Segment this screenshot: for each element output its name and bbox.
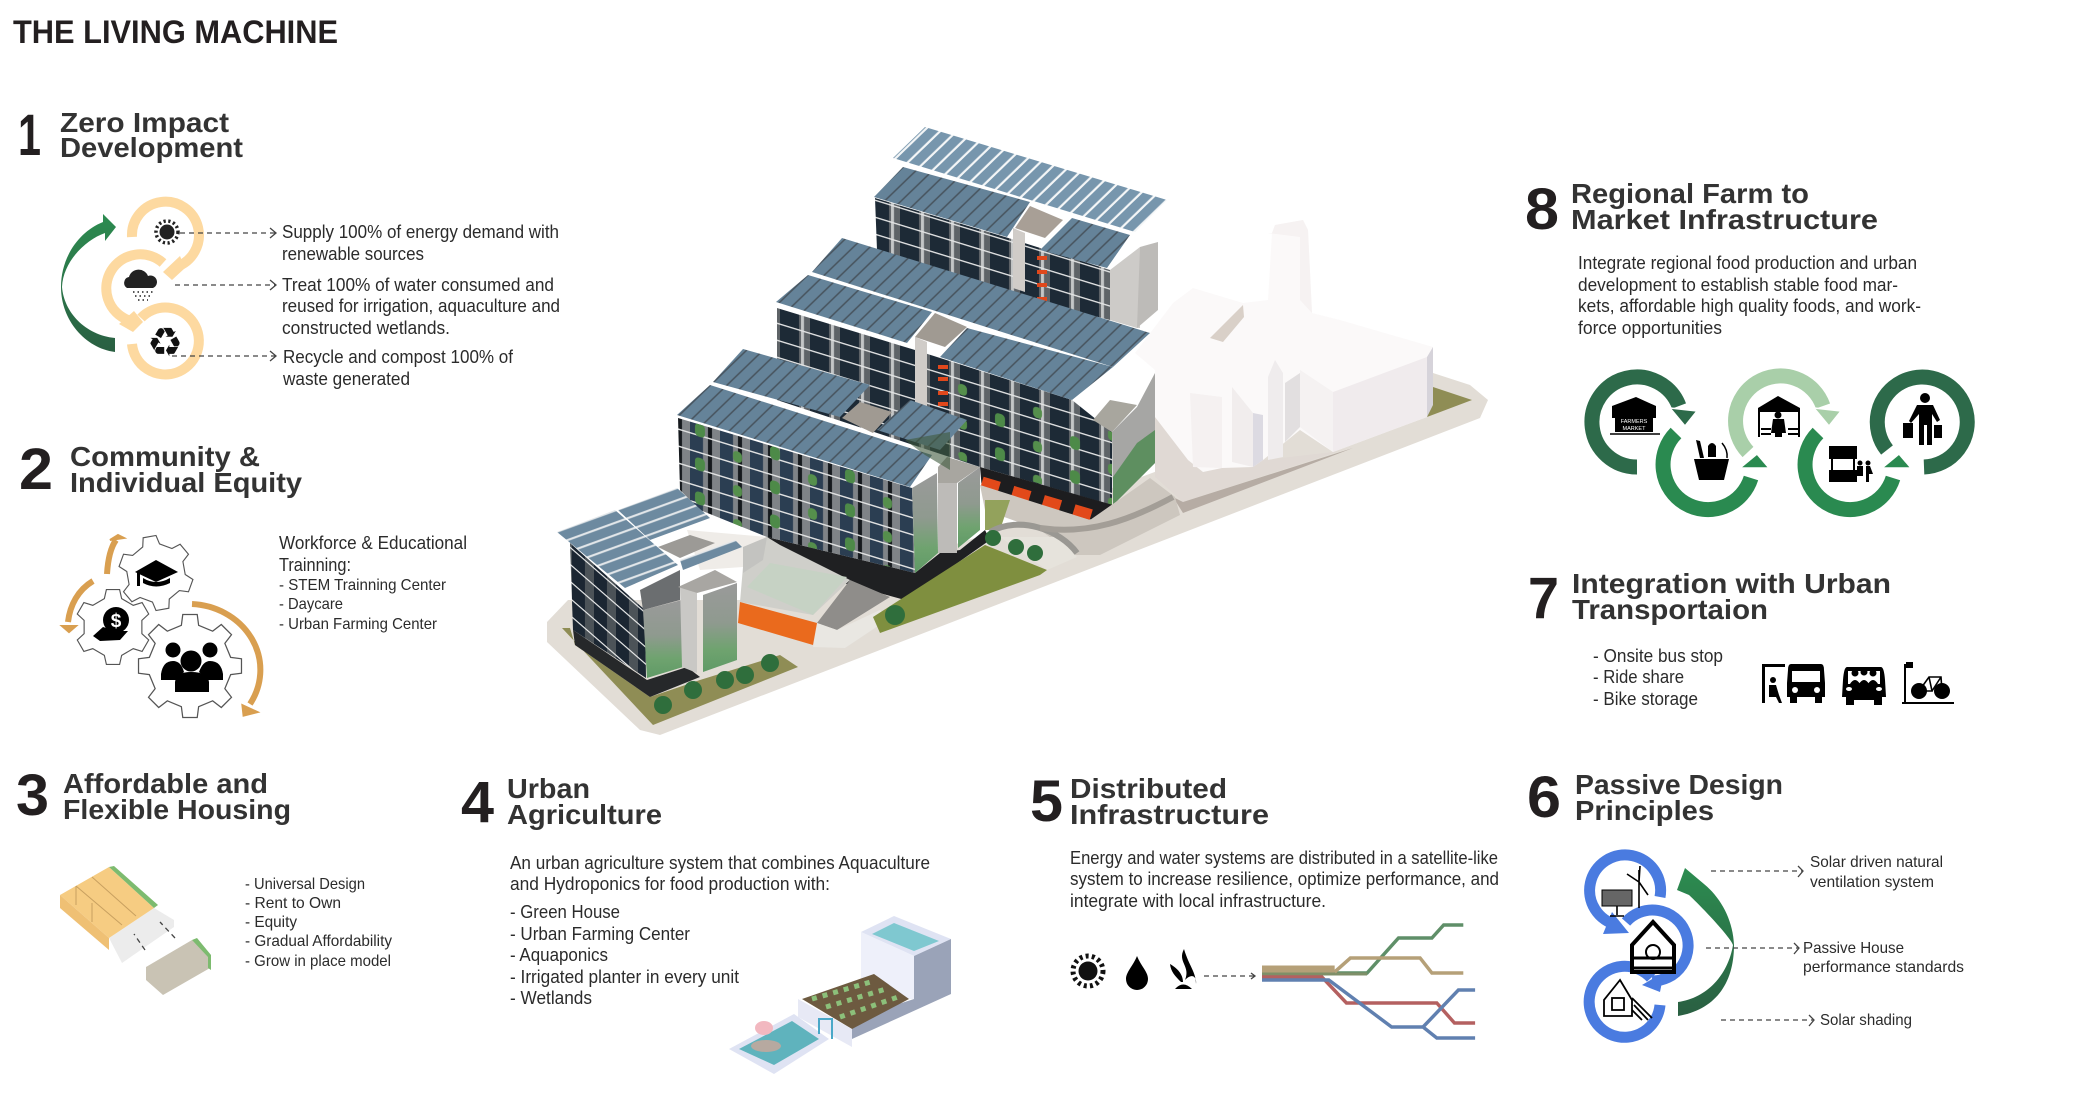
text block [510,853,930,1008]
text block: Integrate regional food production and urban [1578,253,1917,273]
icon: ride share car [1842,667,1886,705]
text block: Recycle and compost 100% of [283,347,514,367]
text block: - Wetlands [510,988,592,1008]
heading [1070,773,1269,830]
text block: performance standards [1803,959,1964,976]
section 7: integration with urban transportation [1528,566,1954,709]
number 6: 6 [1527,765,1561,830]
text block: - Daycare [279,596,343,613]
text block: Supply 100% of energy demand with [282,222,559,242]
text block: - Green House [510,902,620,922]
white church massing [1135,220,1433,472]
dashed arrow [1204,973,1255,979]
section 3: affordable and flexible housing [16,763,392,995]
heading: Distributed [1070,773,1227,804]
title: THE LIVING MACHINE [13,14,338,50]
text block [1070,848,1499,911]
heading [63,768,291,825]
text block [279,533,467,633]
text block: Workforce & Educational [279,533,467,553]
aquaponics illustration [729,916,951,1074]
heading: Urban [507,773,590,804]
section 6: passive design principles [1527,765,1964,1037]
number 3: 3 [16,763,49,828]
icon: recycle: ♻ [147,320,183,366]
section 4: urban agriculture [461,770,951,1074]
heading: Infrastructure [1070,799,1269,830]
icon: bus shelter [1762,664,1785,703]
text block: Trainning: [279,555,351,575]
heading: Affordable and [63,768,268,799]
text block: - Grow in place model [245,953,391,970]
text block: Solar driven natural [1810,854,1943,871]
text block: integrate with local infrastructure. [1070,891,1326,911]
icon: water drop [1126,956,1148,990]
icon: three people [161,642,223,692]
heading [1572,568,1891,625]
text block: - Ride share [1593,667,1684,687]
icon: hand with dollar [93,607,129,641]
icon: bike storage [1902,662,1954,703]
heading [507,773,662,830]
text block: ventilation system [1810,874,1934,891]
number 1: 1 [18,103,41,168]
heading: Community & [70,441,260,472]
heading [1575,769,1783,826]
icon: vendor tent [1758,396,1800,437]
network line diagram [1262,925,1475,1038]
text block [282,222,560,389]
icon: bus [1787,664,1825,703]
text block [1578,253,1921,338]
text block: An urban agriculture system that combines Aquaculture [510,853,930,873]
text block [1593,646,1723,709]
text block: - Aquaponics [510,945,608,965]
text block: reused for irrigation, aquaculture and [282,296,560,316]
building block D [874,127,1167,328]
text block: - Rent to Own [245,895,341,912]
icon: hand with dollar: $ [111,611,122,632]
text block: - STEM Trainning Center [279,577,447,594]
dashed arrows [1706,866,1814,1026]
text block: - Urban Farming Center [279,616,438,633]
text block [1803,854,1964,1029]
heading: Integration with Urban [1572,568,1891,599]
text block: - Equity [245,914,297,931]
heading: Regional Farm to [1571,178,1809,209]
transport icons [1762,662,1954,705]
icon: rain cloud [124,270,157,300]
heading: Market Infrastructure [1571,204,1878,235]
site base [547,373,1488,735]
heading: Passive Design [1575,769,1783,800]
section 8: regional farm to market infrastructure [1525,177,1967,510]
heading: Flexible Housing [63,794,291,825]
icon: farmers market tent: MARKET [1623,426,1646,432]
icon: farmers market tent: FARMERS [1621,419,1648,425]
text block [245,876,392,970]
text block: Treat 100% of water consumed and [282,275,554,295]
heading [60,107,243,163]
section 1: zero impact development [18,103,560,389]
text block: and Hydroponics for food production with: [510,874,830,894]
text block: waste generated [282,369,410,389]
planting strips [562,387,1472,725]
icon: farmers market tent [1610,397,1660,434]
housing block diagram [60,866,211,995]
text block: system to increase resilience, optimize performance, and [1070,869,1499,889]
text block: Solar shading [1820,1012,1912,1029]
courtyard and orange pavilion [738,537,890,648]
section 5: distributed infrastructure [1030,769,1499,1038]
church plaza [1155,417,1353,513]
number 4: 4 [461,770,494,835]
number 2: 2 [19,437,53,502]
icon: food basket [1694,440,1729,480]
icon: shaded house [1604,980,1652,1020]
trees [654,530,1043,714]
number 7: 7 [1528,566,1559,631]
text block: - Bike storage [1593,689,1698,709]
heading: Principles [1575,795,1714,826]
text block: constructed wetlands. [282,318,450,338]
ground plaza and bridge [980,478,1180,570]
number 5: 5 [1030,769,1063,834]
section 2: community and individual equity [19,437,467,717]
central building illustration [547,127,1488,735]
icon: shopper with bags [1903,393,1942,445]
cycle diagram [1589,855,1734,1037]
text block: force opportunities [1578,318,1722,338]
text block: - Universal Design [245,876,365,893]
icon: graduation cap [135,560,178,586]
building block B [677,349,990,600]
heading [1571,178,1878,235]
heading: Development [60,132,243,163]
heading: Individual Equity [70,467,302,498]
gear diagram [62,527,260,717]
text block: development to establish stable food mar- [1578,275,1898,295]
heading: Transportaion [1572,594,1768,625]
text block: - Irrigated planter in every unit [510,967,739,987]
heading [70,441,302,498]
text block: renewable sources [282,244,424,264]
text block: - Urban Farming Center [510,924,690,944]
icon: sun [1073,956,1103,986]
text block: kets, affordable high quality foods, and work- [1578,296,1921,316]
building block C [776,238,1155,520]
icon: sun [156,221,178,243]
building block A [557,488,767,697]
cycle diagram [61,202,199,374]
dashed arrows [172,228,276,361]
ring chain diagram [1592,376,1967,510]
text block: Passive House [1803,940,1904,957]
text block: - Gradual Affordability [245,933,392,950]
icon: passive house [1630,922,1676,972]
text block: Energy and water systems are distributed in a satellite-like [1070,848,1498,868]
number 8: 8 [1525,177,1559,242]
icon: wind turbine and solar [1602,866,1648,916]
garden [873,545,1047,633]
heading: Agriculture [507,799,662,830]
heading: Zero Impact [60,107,229,138]
icon: plant [1170,949,1196,989]
icon: market stand [1829,446,1873,482]
text block: - Onsite bus stop [1593,646,1723,666]
